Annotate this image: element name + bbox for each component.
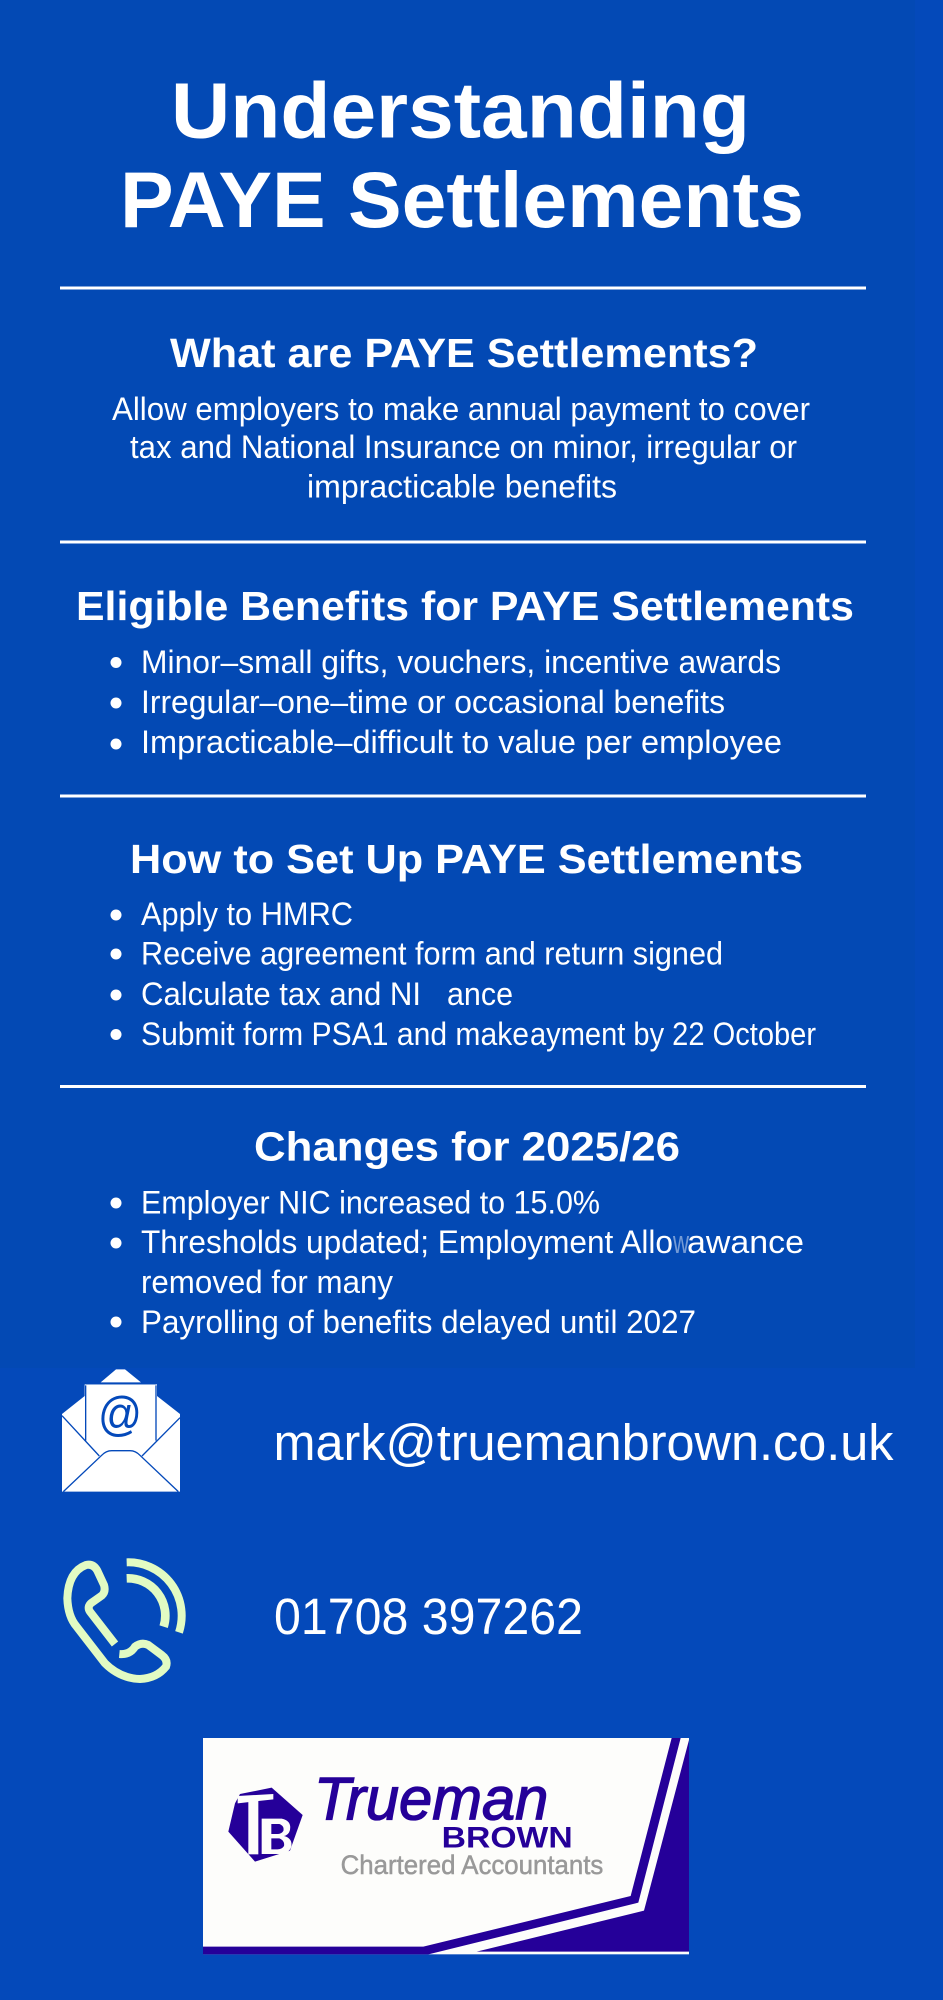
- icon: email envelope: @: [98, 1387, 142, 1441]
- panel: changes for 2025/26: removed for many: [141, 1264, 393, 1300]
- logo: Trueman Brown: Trueman: [314, 1764, 548, 1832]
- panel: how to set up: [110, 836, 816, 1052]
- panel: eligible benefits: Irregular–one–time or occasional benefits: [141, 684, 725, 720]
- email address: mark@truemanbrown.co.uk: [274, 1414, 894, 1471]
- panel: eligible benefits: Minor–small gifts, vouchers, incentive awards: [141, 644, 781, 680]
- panel: how to set up: Apply to HMRC: [141, 896, 353, 932]
- panel: changes for 2025/26: Payrolling of benefits delayed until 2027: [141, 1304, 696, 1340]
- panel: what are PAYE settlements: impracticable benefits: [307, 468, 617, 504]
- panel: changes for 2025/26: Thresholds updated; Employment Allo: [141, 1224, 673, 1260]
- panel: how to set up: ayment by 22 October: [530, 1016, 816, 1052]
- panel: how to set up: Submit form PSA1 and make: [141, 1016, 529, 1052]
- panel: changes for 2025/26: w: [672, 1224, 690, 1260]
- panel: eligible benefits: Eligible Benefits for PAYE Settlements: [76, 583, 854, 629]
- panel: changes for 2025/26: awance: [687, 1224, 804, 1260]
- panel: what are PAYE settlements: Allow employers to make annual payment to cover: [112, 391, 810, 427]
- icon: phone: [67, 1562, 182, 1679]
- title: Understanding: [171, 66, 750, 154]
- panel: how to set up: Receive agreement form and return signed: [141, 936, 723, 972]
- panel: what are PAYE settlements: tax and National Insurance on minor, irregular or: [130, 429, 797, 465]
- panel: what are PAYE settlements: [112, 330, 810, 504]
- icon: email envelope: [62, 1369, 180, 1492]
- panel: changes for 2025/26: [110, 1124, 804, 1340]
- phone number: 01708 397262: [274, 1588, 583, 1645]
- panel: changes for 2025/26: Changes for 2025/26: [254, 1124, 680, 1170]
- logo: Trueman Brown: BROWN: [442, 1821, 573, 1854]
- logo: Trueman Brown: [203, 1738, 689, 1954]
- panel: eligible benefits: Impracticable–difficult to value per employee: [141, 724, 782, 760]
- logo mark: TB hexagon: [228, 1788, 303, 1862]
- panel: what are PAYE settlements: What are PAYE Settlements?: [170, 330, 758, 376]
- logo: Trueman Brown: Chartered Accountants: [341, 1850, 603, 1880]
- title: PAYE Settlements: [120, 155, 804, 244]
- title: [120, 66, 804, 244]
- panel: how to set up: Calculate tax and NI: [141, 976, 421, 1012]
- panel: how to set up: ance: [447, 976, 513, 1012]
- panel: changes for 2025/26: Employer NIC increased to 15.0%: [141, 1184, 600, 1220]
- panel: how to set up: How to Set Up PAYE Settlements: [130, 836, 803, 882]
- panel: eligible benefits: [76, 583, 854, 760]
